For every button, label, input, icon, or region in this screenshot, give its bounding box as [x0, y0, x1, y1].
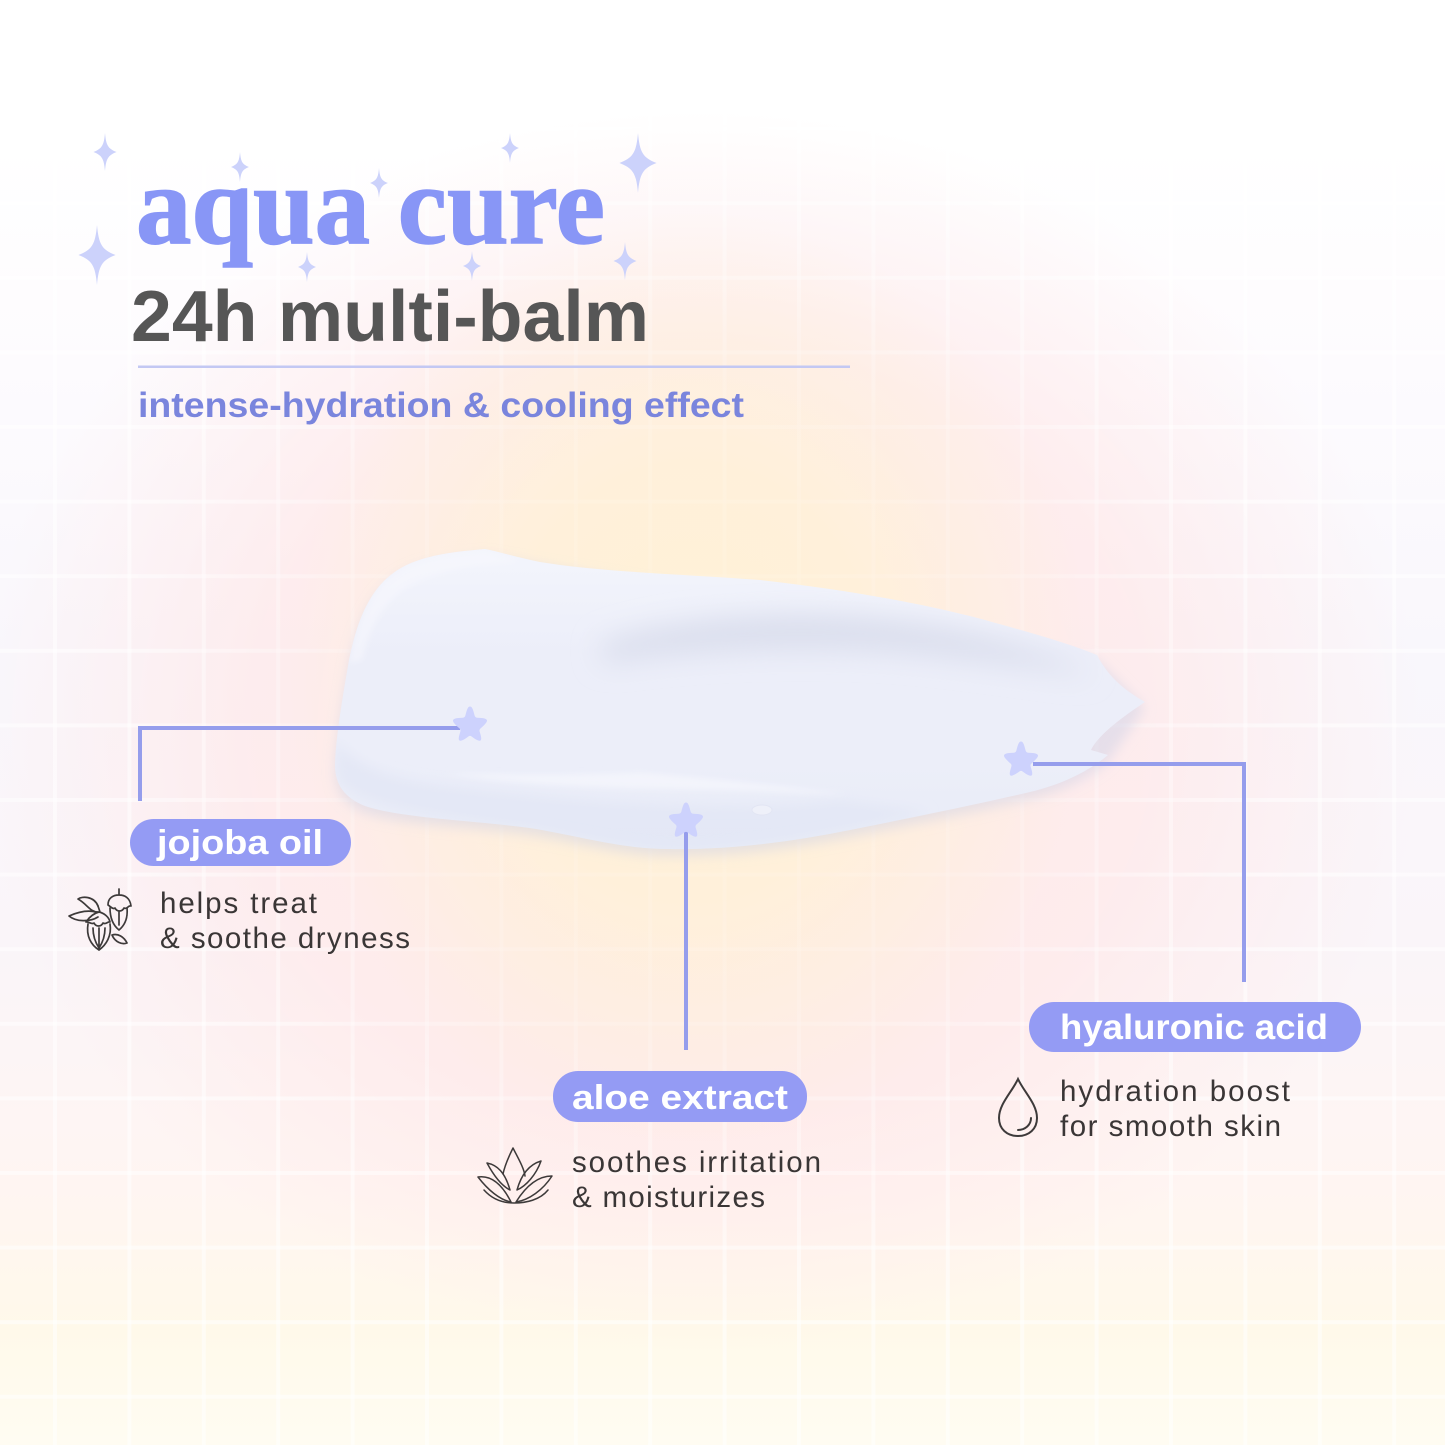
pill: aloe extract: aloe extract: [572, 1079, 788, 1117]
subtitle: 24h multi-balm: 24h multi-balm: [131, 277, 649, 357]
description: hyaluronic acid: [1060, 1075, 1290, 1143]
callout line: hyaluronic acid: [1033, 764, 1244, 982]
callout line: aloe extract: [684, 830, 688, 1050]
pill: hyaluronic acid: [1029, 1002, 1361, 1052]
description: jojoba oil: & soothe dryness: [160, 922, 410, 955]
icon: aloe: [478, 1148, 552, 1203]
balm swatch: [335, 549, 1145, 856]
icon: water drop: [999, 1079, 1037, 1136]
description: aloe extract: & moisturizes: [572, 1181, 765, 1214]
description: hyaluronic acid: for smooth skin: [1060, 1110, 1281, 1143]
ingredient: aloe extract: [478, 1071, 821, 1214]
star marker: jojoba oil: [453, 706, 487, 741]
star marker: hyaluronic acid: [1004, 742, 1038, 776]
ingredient: jojoba oil: [69, 819, 410, 955]
description: jojoba oil: helps treat: [160, 887, 317, 920]
pill: jojoba oil: [130, 819, 351, 866]
divider line: [138, 366, 850, 368]
pill: hyaluronic acid: hyaluronic acid: [1060, 1008, 1328, 1047]
star marker: aloe extract: [669, 802, 703, 837]
pill: aloe extract: [553, 1071, 807, 1122]
description: hyaluronic acid: hydration boost: [1060, 1075, 1290, 1108]
description: aloe extract: [572, 1146, 821, 1214]
ingredient: hyaluronic acid: [999, 1002, 1361, 1143]
icon: jojoba: [69, 889, 131, 950]
title: aqua cure: aqua cure: [136, 144, 605, 268]
description: jojoba oil: [160, 887, 410, 955]
description: aloe extract: soothes irritation: [572, 1146, 821, 1179]
pill: jojoba oil: jojoba oil: [156, 824, 323, 862]
tagline: intense-hydration & cooling effect: [138, 386, 744, 425]
sparkles around title: [78, 133, 657, 285]
callout line: jojoba oil: [140, 728, 460, 801]
